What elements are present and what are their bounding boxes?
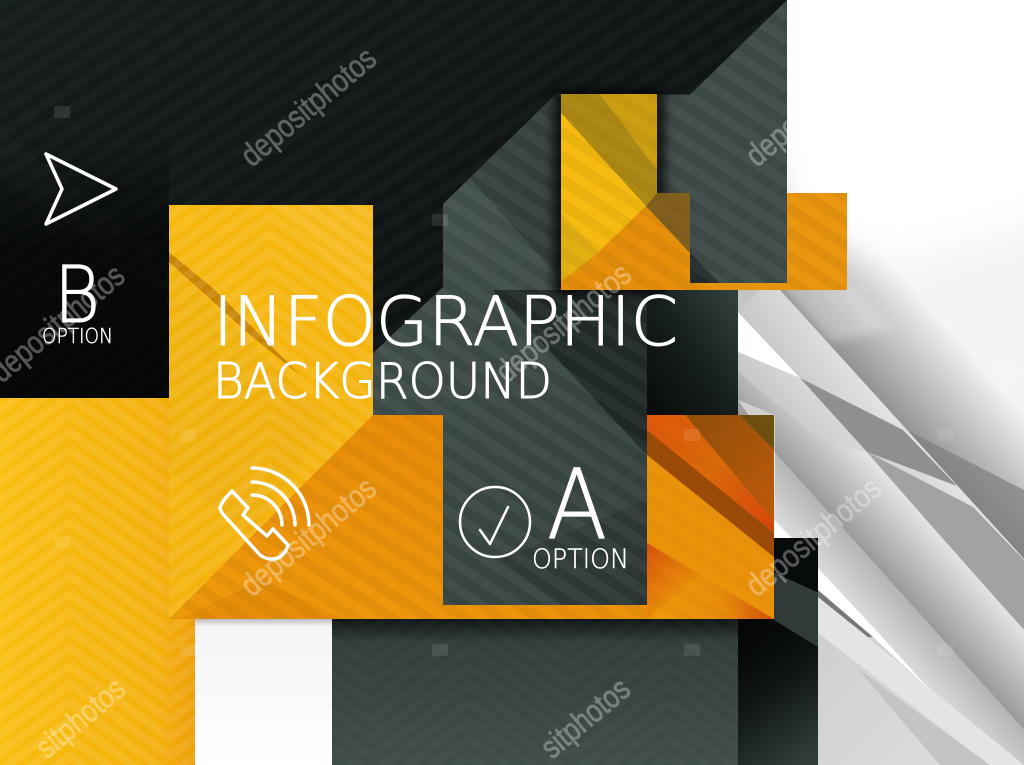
panel: white box — [195, 619, 332, 765]
watermarks: sitphotos — [533, 670, 637, 765]
panel: big yellow and orange block — [169, 205, 647, 619]
grey diagonal stripes — [738, 90, 1024, 765]
panel: small yellow square — [553, 90, 722, 296]
panel: orange tab — [690, 193, 847, 290]
label: option A — [532, 449, 629, 575]
panel: dark block beside title — [647, 290, 738, 415]
watermarks: depositphotos — [488, 256, 638, 389]
label: option B — [42, 251, 113, 348]
title: INFOGRAPHIC BACKGROUND — [213, 283, 678, 410]
title: INFOGRAPHIC BACKGROUND: BACKGROUND — [213, 353, 552, 410]
panel: slate column — [373, 93, 647, 605]
watermarks: depositphotos — [233, 40, 383, 173]
label: option B: B — [54, 251, 100, 341]
watermarks: depositphotos — [738, 40, 888, 173]
panel: left yellow block — [0, 398, 195, 765]
label: option B: OPTION — [42, 324, 113, 348]
panel: bottom slate — [332, 619, 738, 765]
watermarks: sitphotos — [28, 670, 132, 765]
panel: right orange block — [647, 415, 774, 619]
icon: phone — [220, 468, 309, 559]
panel: top right slate block — [657, 0, 787, 283]
title: INFOGRAPHIC BACKGROUND: INFOGRAPHIC — [213, 283, 678, 362]
label: option A: OPTION — [532, 544, 629, 575]
icon: check circle — [460, 487, 530, 557]
label: option A: A — [547, 449, 607, 561]
panel: top dark area — [0, 0, 787, 415]
camera watermark marks — [54, 106, 953, 656]
panel: bottom dark column — [738, 538, 818, 765]
watermarks: depositphotos — [738, 470, 888, 603]
icon: arrow — [46, 154, 116, 224]
watermarks: depositphotos — [233, 470, 383, 603]
